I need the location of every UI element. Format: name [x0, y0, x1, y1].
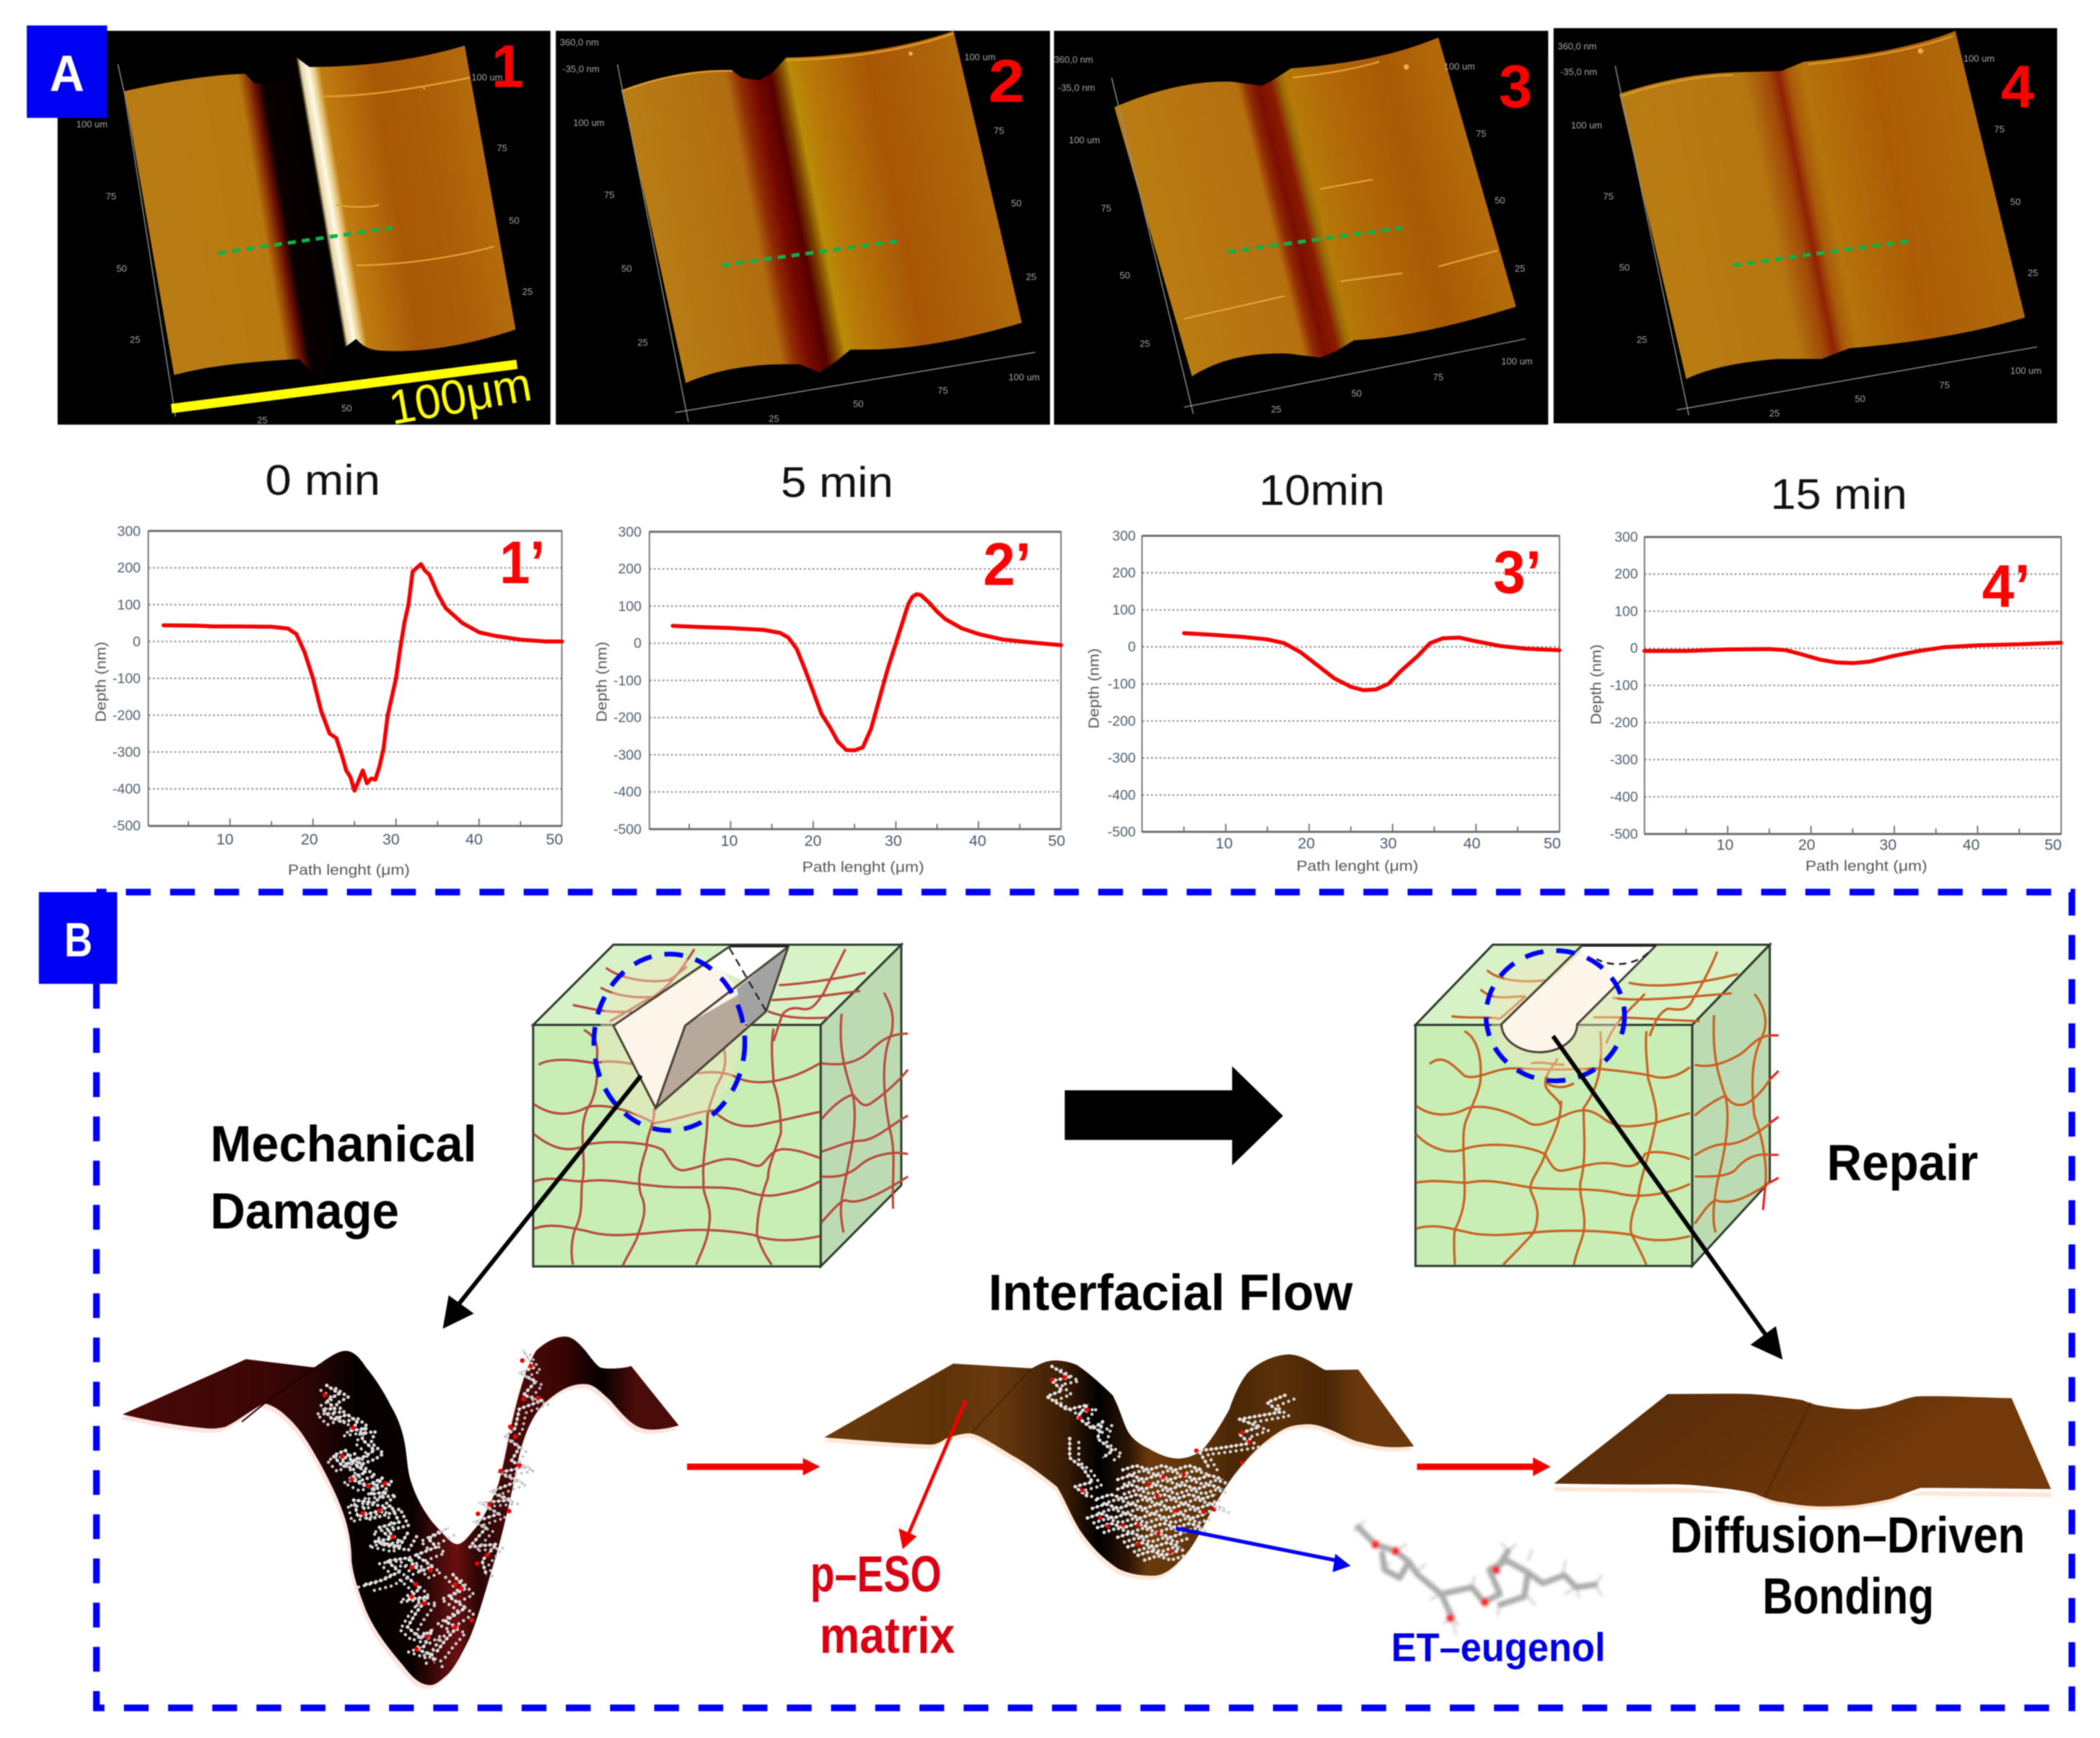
AFM axis labels: 75	[994, 126, 1005, 136]
panel A: AFM topography	[27, 25, 2057, 435]
chart 2': 5 min depth profile: 200	[618, 562, 642, 577]
healed groove	[1502, 946, 1656, 1052]
chart 1': 0 min depth profile: 300	[117, 523, 141, 539]
chart 4': 15 min depth profile: Path lenght (μm)	[1806, 858, 1928, 874]
black arrow from cube to healed surface	[1553, 1036, 1782, 1360]
chart 4': 15 min depth profile: 300	[1614, 530, 1638, 546]
chart 4': 15 min depth profile: 0	[1630, 641, 1638, 657]
chart 3': 10 min depth profile: -100	[1108, 676, 1136, 692]
AFM axis labels: 50	[621, 263, 632, 274]
chart 3': 10 min depth profile: 0	[1128, 639, 1136, 655]
AFM axis labels: 25	[1026, 271, 1036, 282]
AFM axis labels: 100 um	[1444, 61, 1475, 72]
dashed damage circle	[594, 954, 745, 1130]
chart 4': 15 min depth profile: 4’	[1982, 552, 2030, 620]
chart 3': 10 min depth profile: 300	[1112, 528, 1136, 544]
chart 3': 10 min depth profile: 20	[1298, 835, 1315, 852]
ET-eugenol molecule	[1354, 1521, 1602, 1634]
label: ET-eugenol: ET–eugenol	[1391, 1625, 1606, 1669]
AFM image 2: 5 min	[556, 31, 1050, 424]
AFM axis labels: 100 um	[76, 118, 108, 129]
chart 1': 0 min depth profile: 100	[117, 597, 141, 613]
chart 2': 5 min depth profile: 30	[885, 832, 902, 850]
AFM axis labels: 25	[2028, 267, 2038, 278]
chart 4': 15 min depth profile: 50	[2044, 837, 2062, 854]
AFM axis labels: 25	[1271, 404, 1282, 415]
chart 4': 15 min depth profile: 40	[1963, 837, 1979, 854]
chart 1': 0 min depth profile	[94, 523, 563, 878]
AFM axis labels: 25	[1515, 263, 1525, 274]
AFM axis labels: 100 um	[1964, 53, 1995, 64]
chart 2': 5 min depth profile: 40	[969, 832, 986, 850]
AFM axis labels: 25	[1769, 408, 1780, 419]
chart 4': 15 min depth profile: 200	[1614, 567, 1638, 582]
label B	[39, 892, 117, 984]
heading: Diffusion-Driven Bonding: Bonding	[1762, 1567, 1934, 1624]
chart 2': 5 min depth profile: -100	[613, 673, 642, 689]
label: p-ESO matrix	[810, 1545, 955, 1664]
AFM axis labels: 75	[1433, 372, 1443, 383]
AFM axis labels: -35,0 nm	[562, 64, 600, 74]
AFM axis labels	[1557, 41, 2042, 419]
AFM axis labels: 100 um	[1008, 372, 1040, 383]
AFM image 3: 10 min: 3	[1499, 52, 1532, 120]
cube: damaged network	[533, 945, 908, 1267]
AFM axis labels: 75	[1994, 124, 2005, 135]
chart 1': 0 min depth profile: -300	[113, 745, 141, 761]
chart 1': 0 min depth profile: -400	[113, 781, 141, 797]
AFM axis labels: 100 um	[1069, 135, 1100, 146]
AFM axis labels: 100 um	[471, 71, 503, 82]
label A: A	[50, 45, 84, 102]
chart 4': 15 min depth profile: 20	[1798, 837, 1816, 854]
chart 1': 0 min depth profile: 10	[216, 831, 234, 848]
chart 1': 0 min depth profile: 1’	[499, 528, 545, 596]
heading: Diffusion-Driven Bonding	[1670, 1506, 2025, 1624]
chart 1': 0 min depth profile: Depth (nm)	[94, 642, 110, 722]
chart 3': 10 min depth profile: -200	[1108, 713, 1136, 729]
AFM axis labels: 50	[1352, 388, 1362, 398]
AFM axis labels: 50	[116, 263, 127, 274]
AFM axis labels: 25	[130, 334, 140, 345]
AFM axis labels: 25	[769, 414, 779, 424]
AFM axis labels: 50	[341, 403, 352, 414]
chart 3': 10 min depth profile: 10	[1215, 835, 1233, 852]
time labels: 15 min	[1770, 470, 1907, 518]
label: p-ESO matrix: p–ESO	[810, 1545, 942, 1602]
chart 3': 10 min depth profile: Depth (nm)	[1087, 648, 1103, 729]
blue arrow: pointing to molecule	[1176, 1529, 1351, 1572]
AFM axis labels: 100 um	[2011, 365, 2042, 376]
heading: Repair: Repair	[1826, 1134, 1978, 1191]
cube: repaired network	[1415, 945, 1778, 1266]
time labels: 10min	[1259, 466, 1385, 515]
heading: Mechanical Damage: Mechanical	[210, 1115, 477, 1172]
chart 1': 0 min depth profile: 50	[546, 831, 563, 848]
AFM axis labels: 75	[1476, 128, 1487, 139]
AFM axis labels: 25	[1139, 339, 1150, 349]
chart 2': 5 min depth profile: -300	[613, 747, 642, 763]
red arrow: pointing to p-ESO matrix	[898, 1401, 966, 1550]
surface 1: damaged groove with molecules	[120, 1337, 679, 1690]
AFM axis labels: 50	[509, 215, 520, 226]
ET-eugenol molecules in groove	[1047, 1366, 1294, 1560]
AFM axis labels: 50	[2011, 196, 2021, 207]
chart 1': 0 min depth profile: -200	[113, 707, 141, 723]
chart 1': 0 min depth profile: -500	[113, 818, 141, 834]
chart 2': 5 min depth profile: -500	[613, 821, 642, 837]
chart 2': 5 min depth profile: 300	[618, 524, 642, 540]
AFM axis labels: 50	[1120, 270, 1130, 281]
black arrow from cube to damaged surface	[443, 1075, 641, 1329]
chart 2': 5 min depth profile: -200	[613, 710, 642, 726]
AFM axis labels: 25	[1637, 334, 1647, 345]
chart 3': 10 min depth profile: -500	[1108, 824, 1136, 840]
time labels: 0 min	[265, 456, 380, 505]
AFM image 1: 0 min: 1	[491, 32, 524, 100]
AFM axis labels	[76, 71, 533, 425]
heading: Diffusion-Driven Bonding: Diffusion–Driven	[1670, 1506, 2025, 1563]
AFM axis labels: 75	[106, 191, 116, 202]
chart 3': 10 min depth profile	[1087, 528, 1561, 874]
dashed repair circle	[1486, 951, 1624, 1080]
chart 1': 0 min depth profile: 20	[301, 831, 318, 848]
chart 4': 15 min depth profile: -200	[1610, 715, 1638, 731]
label: p-ESO matrix: matrix	[820, 1607, 955, 1664]
AFM axis labels: 25	[522, 286, 533, 297]
chart 2': 5 min depth profile: 10	[721, 832, 738, 850]
chart 4': 15 min depth profile: Depth (nm)	[1589, 645, 1605, 725]
AFM axis labels: 25	[637, 337, 648, 348]
chart 1': 0 min depth profile: 200	[117, 560, 141, 576]
chart 4': 15 min depth profile	[1589, 530, 2062, 874]
ET-eugenol molecules on damaged surface	[317, 1351, 548, 1669]
AFM axis labels	[1054, 54, 1533, 415]
AFM axis labels: 360,0 nm	[1557, 41, 1597, 52]
AFM axis labels: 50	[1495, 195, 1505, 206]
chart 2': 5 min depth profile	[595, 524, 1065, 875]
AFM image 1: 0 min	[58, 31, 551, 435]
AFM axis labels: 100 um	[1571, 120, 1602, 131]
repaired polymer network	[1416, 951, 1770, 1265]
chart 3': 10 min depth profile: 100	[1112, 602, 1136, 618]
chart 3': 10 min depth profile: -300	[1108, 751, 1136, 767]
chart 3': 10 min depth profile: 3’	[1493, 538, 1541, 606]
AFM axis labels: 50	[853, 398, 864, 409]
chart 1': 0 min depth profile: 40	[465, 831, 483, 848]
wedge crack	[613, 947, 788, 1108]
red line ends outside the cube	[1763, 1035, 1778, 1210]
AFM axis labels: 75	[1603, 191, 1614, 202]
AFM image 4: 15 min	[1554, 28, 2057, 423]
AFM axis labels: -35,0 nm	[1560, 66, 1597, 77]
AFM axis labels: 100 um	[964, 52, 996, 63]
chart 4': 15 min depth profile: 30	[1879, 837, 1896, 854]
heading: Mechanical Damage: Damage	[210, 1182, 399, 1239]
AFM axis labels: 100 um	[573, 117, 605, 128]
AFM axis labels: 360,0 nm	[1054, 54, 1093, 65]
AFM image 4: 15 min: 4	[2001, 52, 2034, 120]
surface 2: interfacial flow with molecules	[822, 1355, 1414, 1580]
AFM axis labels: 25	[257, 414, 268, 425]
AFM axis labels: 100 um	[1501, 356, 1533, 367]
red arrow: stage 2 to 3	[1417, 1457, 1551, 1476]
AFM axis labels: 75	[497, 143, 507, 154]
time labels: 5 min	[781, 458, 893, 507]
AFM axis labels: 75	[1101, 203, 1111, 214]
AFM axis labels: 50	[1011, 198, 1022, 209]
surface 3: healed film	[1554, 1394, 2051, 1510]
chart 4': 15 min depth profile: -300	[1610, 752, 1638, 768]
chart 1': 0 min depth profile: -100	[113, 671, 141, 686]
chart 2': 5 min depth profile: Depth (nm)	[595, 642, 611, 722]
chart 3': 10 min depth profile: 30	[1380, 835, 1397, 852]
chart 2': 5 min depth profile: -400	[613, 785, 642, 800]
panel B: healing mechanism	[39, 892, 2072, 1708]
time labels	[265, 456, 1907, 518]
big black arrow	[1064, 1066, 1283, 1166]
chart 2': 5 min depth profile: 2’	[983, 530, 1031, 598]
chart 4': 15 min depth profile: -500	[1610, 826, 1638, 842]
AFM axis labels	[560, 37, 1040, 424]
AFM axis labels: 75	[937, 385, 948, 396]
chart 1': 0 min depth profile: Path lenght (μm)	[288, 863, 410, 878]
heading: Interfacial Flow: Interfacial Flow	[989, 1264, 1353, 1321]
AFM axis labels: 75	[604, 190, 614, 201]
label A	[27, 25, 107, 118]
red polymer network	[534, 949, 908, 1266]
scale bar 100 um	[172, 358, 535, 435]
chart 3': 10 min depth profile: 200	[1112, 565, 1136, 581]
chart 3': 10 min depth profile: 50	[1544, 835, 1561, 852]
chart 2': 5 min depth profile: 0	[634, 636, 642, 652]
chart 2': 5 min depth profile: 100	[618, 598, 642, 614]
AFM image 2: 5 min: 2	[989, 47, 1025, 115]
AFM axis labels: 50	[1619, 262, 1629, 273]
AFM axis labels: 360,0 nm	[560, 37, 599, 48]
chart 3': 10 min depth profile: -400	[1108, 787, 1136, 803]
AFM axis labels: 75	[1939, 380, 1950, 390]
AFM axis labels: 50	[1855, 393, 1865, 404]
red arrow: stage 1 to 2	[687, 1458, 821, 1475]
chart 4': 15 min depth profile: 10	[1716, 837, 1733, 854]
chart 1': 0 min depth profile: 0	[133, 634, 141, 650]
chart 2': 5 min depth profile: 50	[1048, 832, 1065, 850]
chart 2': 5 min depth profile: Path lenght (μm)	[802, 860, 924, 875]
chart 2': 5 min depth profile: 20	[805, 832, 822, 850]
label B: B	[64, 914, 92, 967]
chart 4': 15 min depth profile: -400	[1610, 789, 1638, 805]
chart 1': 0 min depth profile: 30	[382, 831, 400, 848]
chart 4': 15 min depth profile: -100	[1610, 678, 1638, 694]
chart 4': 15 min depth profile: 100	[1614, 603, 1638, 619]
chart 3': 10 min depth profile: Path lenght (μm)	[1296, 858, 1418, 874]
AFM axis labels: -35,0 nm	[1058, 82, 1095, 93]
scale bar 100 um: 100μm	[385, 358, 535, 435]
AFM image 3: 10 min	[1054, 31, 1548, 424]
heading: Mechanical Damage	[210, 1115, 477, 1239]
chart 3': 10 min depth profile: 40	[1464, 835, 1481, 852]
